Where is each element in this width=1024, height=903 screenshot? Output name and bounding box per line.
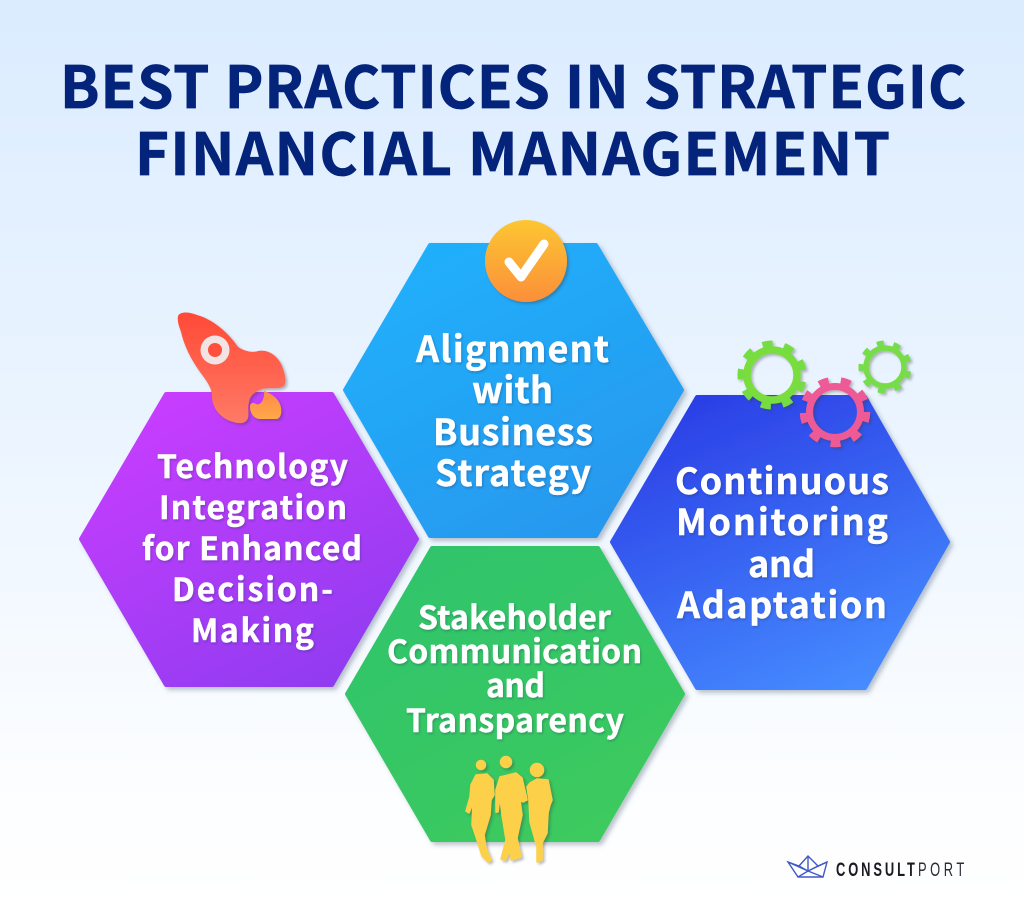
title: FINANCIAL MANAGEMENT [135,108,890,192]
text: port: PORT [918,860,964,881]
text: technology integration [142,442,362,652]
text: alignment: Business [433,404,593,456]
icon: rocket [178,312,285,423]
icon: gears [735,338,913,444]
icon: check badge [485,220,567,302]
rocket body [178,312,285,423]
text: stakeholder: Stakeholder [418,593,611,639]
text: alignment: Alignment [415,321,609,373]
rocket flame [250,391,281,419]
icon: paper boat [788,856,827,877]
panel: technology integration hexagon [81,394,417,685]
text: stakeholder [387,593,642,742]
person right [527,764,552,862]
text: continuous monitoring: and [748,536,815,588]
icon: pink gear [803,380,867,444]
text: stakeholder: Transparency [406,696,624,742]
icon: people silhouettes [466,756,552,862]
panel: alignment hexagon [345,245,682,536]
text: alignment: with [472,362,553,414]
text: alignment [415,321,609,497]
panel: continuous monitoring hexagon [612,397,948,688]
logo: consultport [788,856,964,881]
person left [466,760,494,862]
icon: green gear large [735,338,809,412]
person middle [496,756,527,860]
title [60,41,966,192]
text: continuous monitoring: Adaptation [676,577,887,629]
text: continuous monitoring [675,453,889,629]
panel: stakeholder hexagon [347,548,683,840]
text: continuous monitoring: Monitoring [676,494,888,546]
text: stakeholder: and [486,661,545,707]
text: technology integration: Integration [159,483,347,529]
icon: green gear small [857,339,913,395]
text: consult: CONSULT [836,860,915,881]
text: technology integration: for Enhanced [142,524,362,570]
text: alignment: Strategy [435,445,591,497]
text: stakeholder: Communication [387,627,642,673]
text: technology integration: Making [191,606,314,652]
text: technology integration: Decision- [172,565,333,611]
text: technology integration: Technology [157,442,348,488]
title: BEST PRACTICES IN STRATEGIC [60,41,966,125]
text: continuous monitoring: Continuous [675,453,889,505]
